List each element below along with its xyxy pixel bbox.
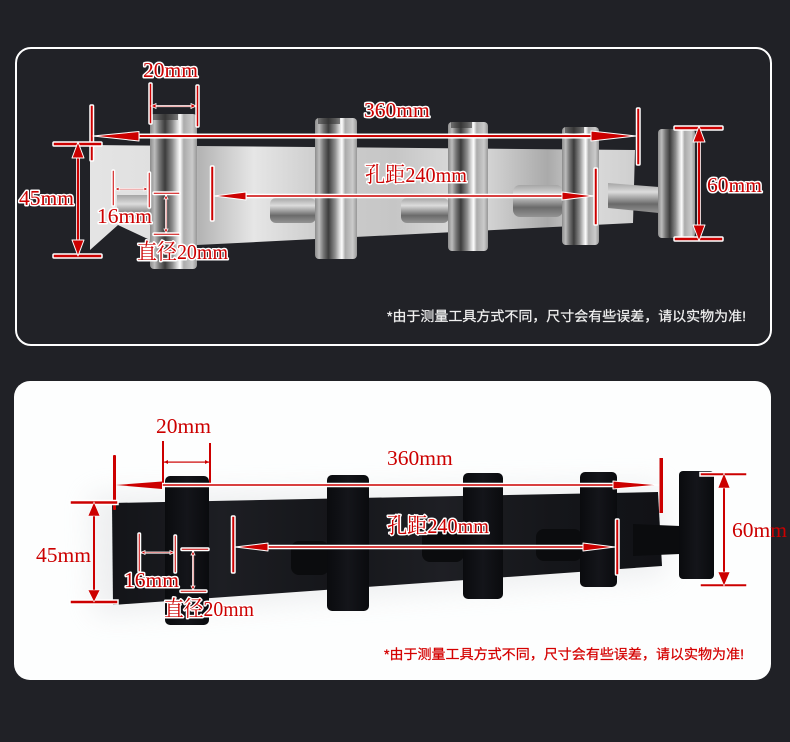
panel: black hook dimensions xyxy=(14,381,787,680)
dimension: 60mm hook height xyxy=(700,472,787,587)
dimension: 孔距240mm hole spacing xyxy=(210,163,598,225)
dimension: 孔距240mm hole spacing: 孔距240mm xyxy=(365,163,467,187)
dimension: 45mm plate height xyxy=(36,500,118,604)
dimension: 20mm hook width xyxy=(143,58,199,127)
panel background xyxy=(16,48,771,345)
note: measurement disclaimer: *由于测量工具方式不同，尺寸会有些误差，请以实物为准! xyxy=(384,647,744,662)
dimension: 直径20mm diameter: 直径20mm xyxy=(164,597,254,621)
dimension: 45mm plate height: 45mm xyxy=(36,543,91,567)
panel: stainless steel hook dimensions xyxy=(16,48,771,345)
dimension: 20mm hook width: 20mm xyxy=(143,58,198,82)
dimension: 360mm total length xyxy=(90,98,640,165)
dimension: 60mm hook height: 60mm xyxy=(707,173,762,197)
dimension: 360mm total length: 360mm xyxy=(387,446,453,470)
dimension: 16mm arm offset xyxy=(97,170,152,228)
dimension: 直径20mm diameter xyxy=(137,192,228,264)
dimension: 直径20mm diameter: 直径20mm xyxy=(137,240,228,264)
dimension: 45mm plate height: 45mm xyxy=(19,186,74,210)
dimension: 60mm hook height xyxy=(674,126,762,241)
dimension: 直径20mm diameter xyxy=(164,548,254,621)
product: stainless steel hook rack xyxy=(90,114,695,269)
dimension: 45mm plate height xyxy=(19,142,102,258)
dimension: 孔距240mm hole spacing: 孔距240mm xyxy=(387,514,489,538)
product: black hook rack xyxy=(90,471,714,625)
dimension: 16mm arm offset: 16mm xyxy=(97,204,152,228)
dimension: 16mm arm offset: 16mm xyxy=(124,568,179,592)
dimension: 360mm total length xyxy=(113,446,663,513)
note: measurement disclaimer: *由于测量工具方式不同，尺寸会有些误差，请以实物为准! xyxy=(387,309,746,324)
panel background xyxy=(14,381,771,680)
dimension: 360mm total length: 360mm xyxy=(364,98,430,122)
dimension: 孔距240mm hole spacing xyxy=(232,514,619,575)
dimension: 20mm hook width: 20mm xyxy=(156,414,211,438)
dimension: 20mm hook width xyxy=(156,414,211,484)
dimension: 60mm hook height: 60mm xyxy=(732,518,787,542)
dimension: 16mm arm offset xyxy=(124,533,179,592)
